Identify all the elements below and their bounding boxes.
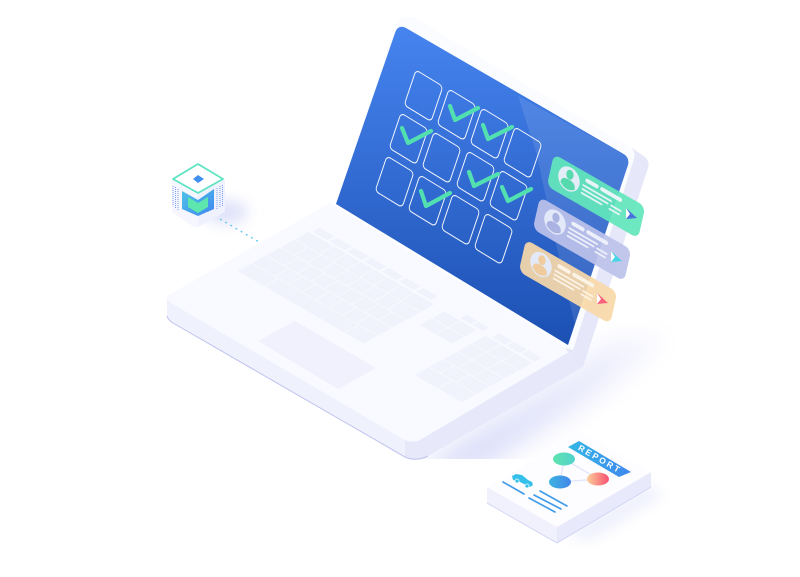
lid bezel — [336, 17, 634, 350]
screen glare — [518, 96, 628, 325]
report top — [487, 432, 651, 527]
icon: car — [512, 474, 533, 488]
screen — [336, 27, 628, 345]
laptop shadow — [426, 342, 640, 459]
cube shadow — [204, 200, 248, 224]
dotted connector — [220, 219, 259, 242]
laptop base top — [167, 203, 572, 441]
report text lines — [503, 482, 567, 512]
lid side — [566, 148, 649, 367]
report sides — [487, 487, 557, 543]
numpad large — [415, 331, 541, 402]
checkbox grid — [375, 70, 542, 264]
report document — [487, 432, 651, 543]
report shadow — [565, 485, 662, 540]
numpad small — [420, 307, 489, 346]
illustration — [166, 26, 656, 544]
report network diagram — [549, 452, 609, 488]
report banner — [568, 441, 631, 477]
card: orange profile — [519, 240, 617, 324]
card: green profile — [547, 154, 645, 239]
laptop — [167, 17, 649, 459]
report banner: REPORT — [576, 443, 624, 475]
check marks — [402, 106, 531, 206]
card: purple profile — [533, 197, 631, 282]
icon: cube — [172, 164, 225, 227]
trackpad — [258, 321, 376, 389]
keyboard — [238, 227, 443, 344]
laptop base sides — [167, 298, 583, 459]
